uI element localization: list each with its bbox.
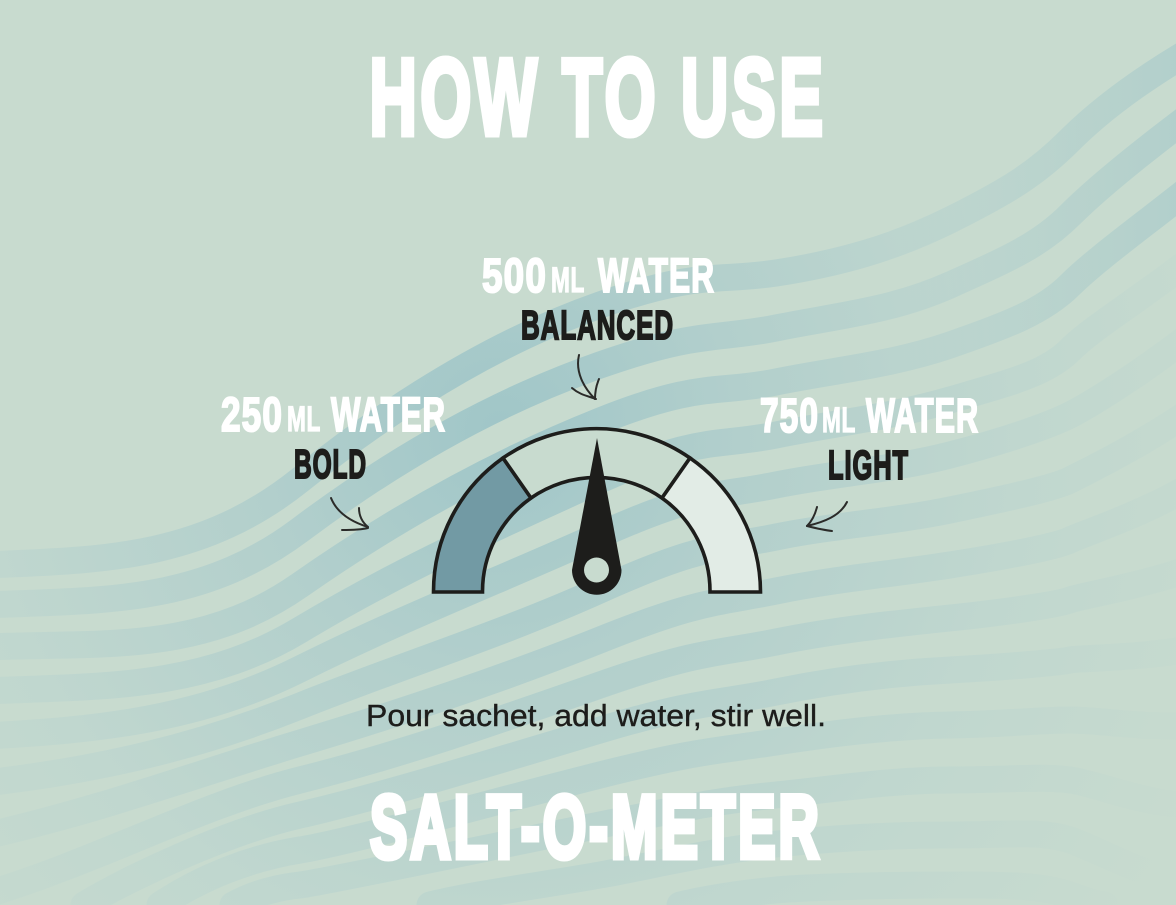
label: 250ml water bold: BOLD: [294, 441, 367, 487]
label: 750ml water light: 750: [760, 390, 819, 443]
label: 250ml water bold: [221, 389, 446, 487]
gauge segment: light: [662, 458, 760, 592]
arrow: bold: [331, 498, 368, 530]
label: 750ml water light: ML: [822, 401, 856, 440]
needle hub hole: [584, 558, 609, 582]
gauge: salt-o-meter dial: [433, 429, 760, 595]
label: 750ml water light: [760, 390, 979, 488]
label: 250ml water bold: ML: [287, 400, 321, 439]
gauge needle: [572, 438, 622, 595]
label: 750ml water light: LIGHT: [828, 442, 909, 488]
label: 500ml water balanced: ML: [551, 261, 585, 300]
label: 500ml water balanced: [482, 250, 715, 348]
label: 750ml water light: WATER: [866, 390, 979, 443]
gauge segment: bold: [433, 458, 531, 592]
label: 250ml water bold: 250: [221, 389, 283, 442]
arrow: balanced: [572, 355, 599, 399]
instruction text: Pour sachet, add water, stir well.: [366, 698, 826, 733]
arrow: light: [807, 502, 847, 531]
label: 500ml water balanced: WATER: [598, 250, 715, 303]
label: 500ml water balanced: BALANCED: [521, 302, 674, 348]
label: 250ml water bold: WATER: [331, 389, 446, 442]
gauge segment: balanced: [503, 429, 690, 498]
label: 500ml water balanced: 500: [482, 250, 547, 303]
title: how to use: HOW TO USE: [370, 36, 826, 158]
footer title: salt-o-meter: SALT-O-METER: [370, 776, 822, 876]
